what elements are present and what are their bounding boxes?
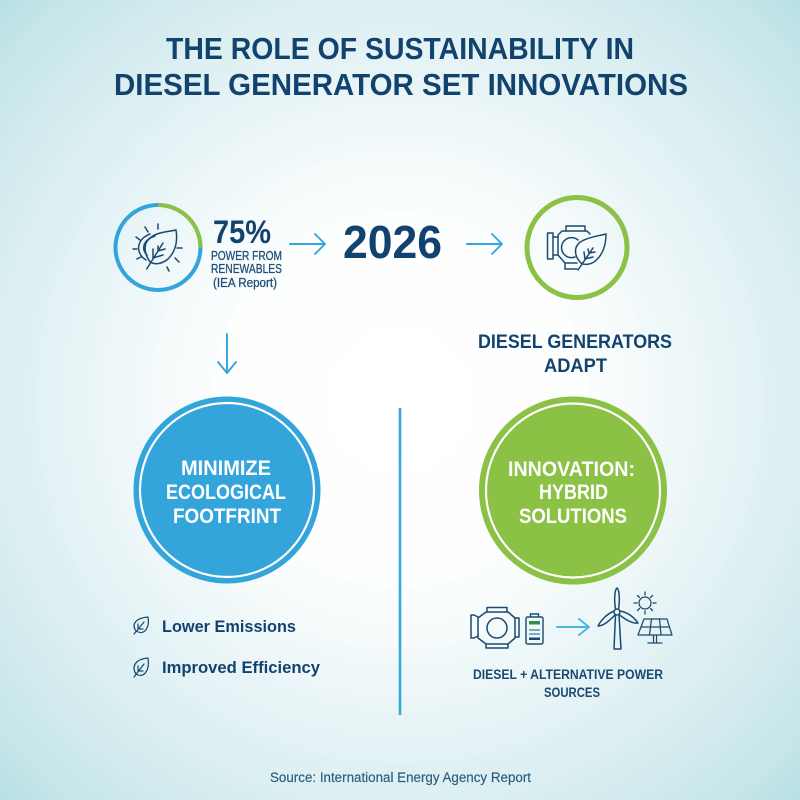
list item: improved efficiency: Improved Efficiency — [162, 658, 321, 677]
icon: renewables progress ring with sun and leaf — [116, 205, 200, 290]
panel: innovation hybrid solutions circle: HYBRID — [539, 481, 608, 504]
title — [114, 31, 688, 102]
caption: diesel + alternative power sources: DIESEL + ALTERNATIVE POWER — [473, 667, 663, 682]
stat: 75% power from renewables: RENEWABLES — [211, 262, 282, 276]
list item: lower emissions: Lower Emissions — [162, 617, 296, 636]
panel: innovation hybrid solutions circle — [479, 396, 667, 584]
icon: solar panel — [638, 619, 672, 643]
panel: innovation hybrid solutions circle: SOLUTIONS — [519, 505, 627, 528]
heading: diesel generators adapt — [478, 331, 672, 377]
arrow: 2026 to engine — [467, 234, 502, 254]
stat: 75% power from renewables: POWER FROM — [211, 249, 282, 263]
icon: diesel engine — [471, 608, 519, 648]
panel: innovation hybrid solutions circle: INNOVATION: — [508, 458, 635, 481]
heading: diesel generators adapt: ADAPT — [544, 355, 607, 377]
panel: minimize ecological footprint circle: ECOLOGICAL — [166, 481, 286, 504]
arrow: stat to 2026 — [290, 234, 325, 254]
arrow: down to footprint circle — [218, 334, 236, 373]
heading: diesel generators adapt: DIESEL GENERATORS — [478, 331, 672, 353]
caption: diesel + alternative power sources: SOURCES — [544, 685, 600, 700]
title: THE ROLE OF SUSTAINABILITY IN — [166, 31, 634, 66]
icon: engine with leaf in green ring — [527, 198, 627, 298]
icon: sun — [634, 592, 656, 614]
arrow: diesel to alternative power — [557, 619, 589, 635]
source note: Source: International Energy Agency Report — [270, 770, 531, 785]
stat: 75% power from renewables: 75% — [213, 214, 271, 250]
icon: wind turbine — [598, 588, 638, 649]
panel: minimize ecological footprint circle: FOOTFRINT — [173, 505, 281, 528]
stat: 75% power from renewables: (IEA Report) — [213, 276, 277, 290]
icon: battery — [526, 614, 543, 644]
year 2026: 2026 — [343, 216, 442, 268]
panel: minimize ecological footprint circle: MINIMIZE — [181, 457, 271, 480]
stat: 75% power from renewables — [211, 214, 282, 290]
panel: minimize ecological footprint circle — [134, 396, 320, 584]
caption: diesel + alternative power sources — [473, 667, 663, 700]
title: DIESEL GENERATOR SET INNOVATIONS — [114, 67, 688, 102]
divider — [399, 408, 401, 715]
